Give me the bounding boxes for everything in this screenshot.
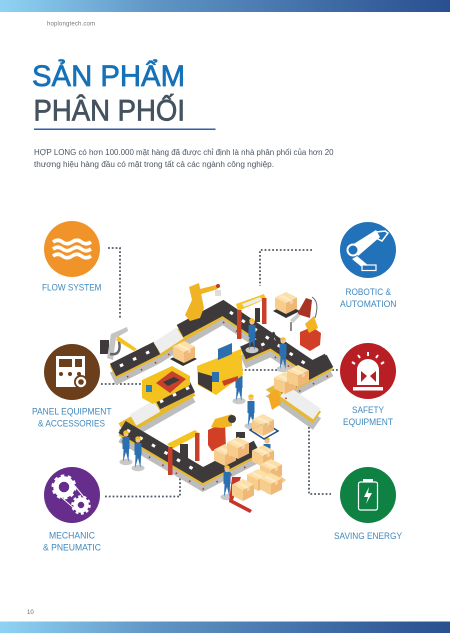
connector lines <box>101 248 338 496</box>
top gradient bar <box>0 0 450 12</box>
category: saving energy <box>334 467 402 541</box>
title <box>32 59 185 128</box>
gantry top <box>236 294 266 339</box>
top yellow robot <box>185 283 221 321</box>
bottom gradient bar <box>0 622 450 633</box>
category: robotic: ROBOTIC & <box>346 287 391 297</box>
welding robot left <box>100 327 137 360</box>
website label: hoplongtech.com <box>47 22 95 28</box>
icon: waves <box>44 221 100 277</box>
category: panel equipment <box>32 344 112 428</box>
category: robotic <box>340 222 396 309</box>
workers <box>120 318 290 500</box>
yellow central machine <box>197 343 243 395</box>
page number: 10 <box>27 610 34 616</box>
top right robot <box>290 297 321 351</box>
lower gantry <box>167 430 200 475</box>
title: PHÂN PHỐI <box>34 94 185 128</box>
category: mechanic <box>43 467 102 552</box>
category: robotic: AUTOMATION <box>340 299 396 309</box>
category: safety: SAFETY <box>352 405 384 415</box>
title underline <box>34 128 216 130</box>
conveyor belts <box>113 308 330 489</box>
intro paragraph: HỢP LONG có hơn 100.000 mặt hàng đã được chỉ định là nhà phân phối của hơn 20 <box>34 148 334 157</box>
category: safety: EQUIPMENT <box>343 417 394 427</box>
intro paragraph: thương hiệu hàng đầu có mặt trong tất cả các ngành công nghiệp. <box>34 160 274 169</box>
box on central pallet <box>170 341 197 366</box>
category: panel equipment: PANEL EQUIPMENT <box>32 406 112 416</box>
red machine <box>142 366 190 404</box>
pallet jack <box>229 477 254 513</box>
icon: robot arm <box>340 222 396 278</box>
icon: siren <box>340 343 396 399</box>
icon: battery <box>340 467 396 523</box>
boxes on lower belt <box>214 437 274 467</box>
intro paragraph <box>34 148 334 169</box>
boxes on right belt <box>274 365 309 394</box>
scale station right <box>250 388 281 439</box>
category: mechanic: & PNEUMATIC <box>43 542 102 552</box>
category: mechanic: MECHANIC <box>49 530 96 540</box>
box top right <box>273 292 300 318</box>
centre orange robot <box>208 414 245 451</box>
icon: gears <box>44 467 100 523</box>
category: flow system <box>42 221 102 292</box>
icon: control panel <box>44 344 100 400</box>
category: flow system: FLOW SYSTEM <box>42 282 102 292</box>
factory illustration <box>100 283 330 513</box>
category: saving energy: SAVING ENERGY <box>334 531 402 541</box>
stacked boxes <box>247 459 286 495</box>
title: SẢN PHẨM <box>32 59 185 93</box>
category: panel equipment: & ACCESSORIES <box>38 418 105 428</box>
category: safety <box>340 343 396 427</box>
